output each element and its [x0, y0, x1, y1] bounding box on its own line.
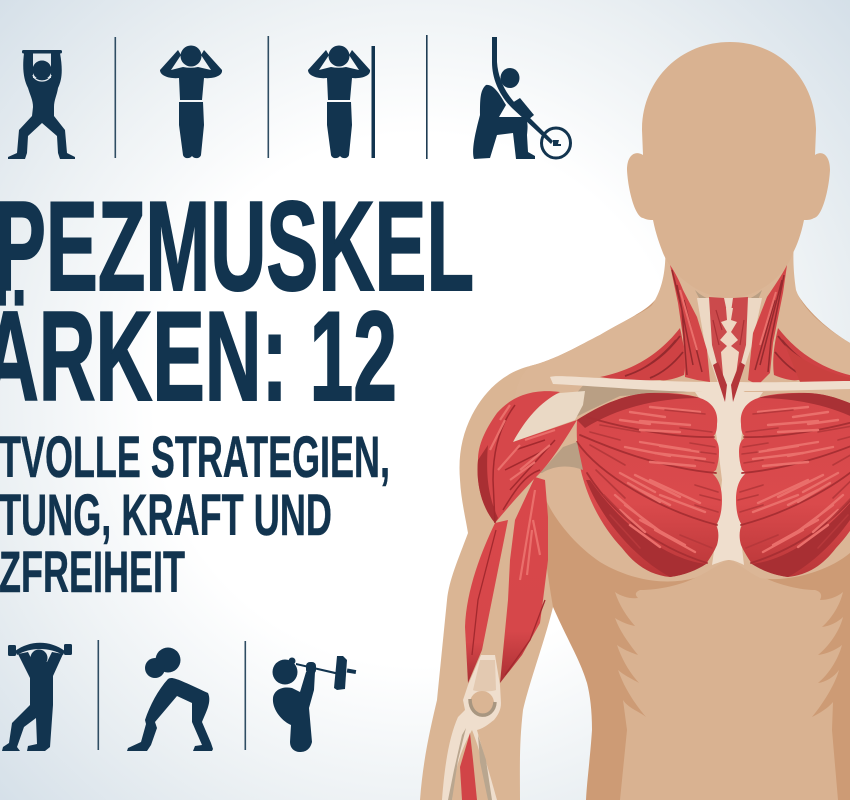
- head: [627, 42, 830, 298]
- muscle: forearm: [460, 733, 477, 800]
- anatomical figure: [420, 42, 850, 800]
- sternum: [695, 392, 763, 565]
- divider: [114, 37, 116, 158]
- muscle: sternocleidomastoid right: [748, 265, 787, 385]
- icons: top exercise row: [8, 35, 570, 159]
- arm silhouette: [420, 366, 600, 800]
- muscle: pectoral left: [577, 393, 722, 577]
- torso: [530, 280, 850, 800]
- title line 2: ÄRKEN: 12: [0, 285, 397, 427]
- muscle: biceps outer: [465, 520, 508, 683]
- neck shadow: [695, 290, 762, 304]
- muscle: sternocleidomastoid left: [670, 265, 710, 382]
- muscle: deltoid: [478, 391, 577, 523]
- muscle: sternal slips: [713, 362, 745, 402]
- shoulder bone: [513, 391, 585, 442]
- divider: [98, 640, 99, 750]
- icon: barbell press: [272, 656, 356, 752]
- divider: [426, 35, 428, 159]
- icon: standing hands behind head: [160, 46, 222, 158]
- muscle: biceps inner: [500, 477, 548, 683]
- subtitle line 1: TVOLLE STRATEGIEN,: [0, 425, 390, 490]
- abdomen: [615, 560, 843, 800]
- upper chest and shoulders: [514, 240, 850, 581]
- icon: kneeling stretch with wheel: [473, 37, 570, 159]
- pale throat: [697, 298, 762, 395]
- icon: forward bend: [127, 648, 213, 751]
- shadow under clavicle: [570, 383, 690, 420]
- armpit shadow: [540, 442, 583, 473]
- icon: standing with pole: [308, 46, 375, 158]
- icons: bottom exercise row: [2, 640, 356, 752]
- muscle: pectoral right: [736, 393, 850, 577]
- divider: [244, 641, 246, 750]
- muscle: central neck: [709, 297, 748, 375]
- muscle: trapezius left: [600, 328, 685, 380]
- subtitle line 2: TUNG, KRAFT UND: [0, 483, 332, 548]
- muscle: trapezius right extension: [785, 345, 850, 384]
- subtitle line 3: ZFREIHEIT: [0, 540, 185, 605]
- icon: overhead band lift: [2, 643, 72, 751]
- icon: overhead bar squat: [8, 50, 75, 159]
- divider: [268, 36, 269, 158]
- clavicle: [550, 376, 850, 401]
- muscle: trapezius right: [773, 328, 850, 380]
- elbow and forearm bones: [442, 655, 501, 800]
- title line 1: PEZMUSKEL: [0, 175, 474, 317]
